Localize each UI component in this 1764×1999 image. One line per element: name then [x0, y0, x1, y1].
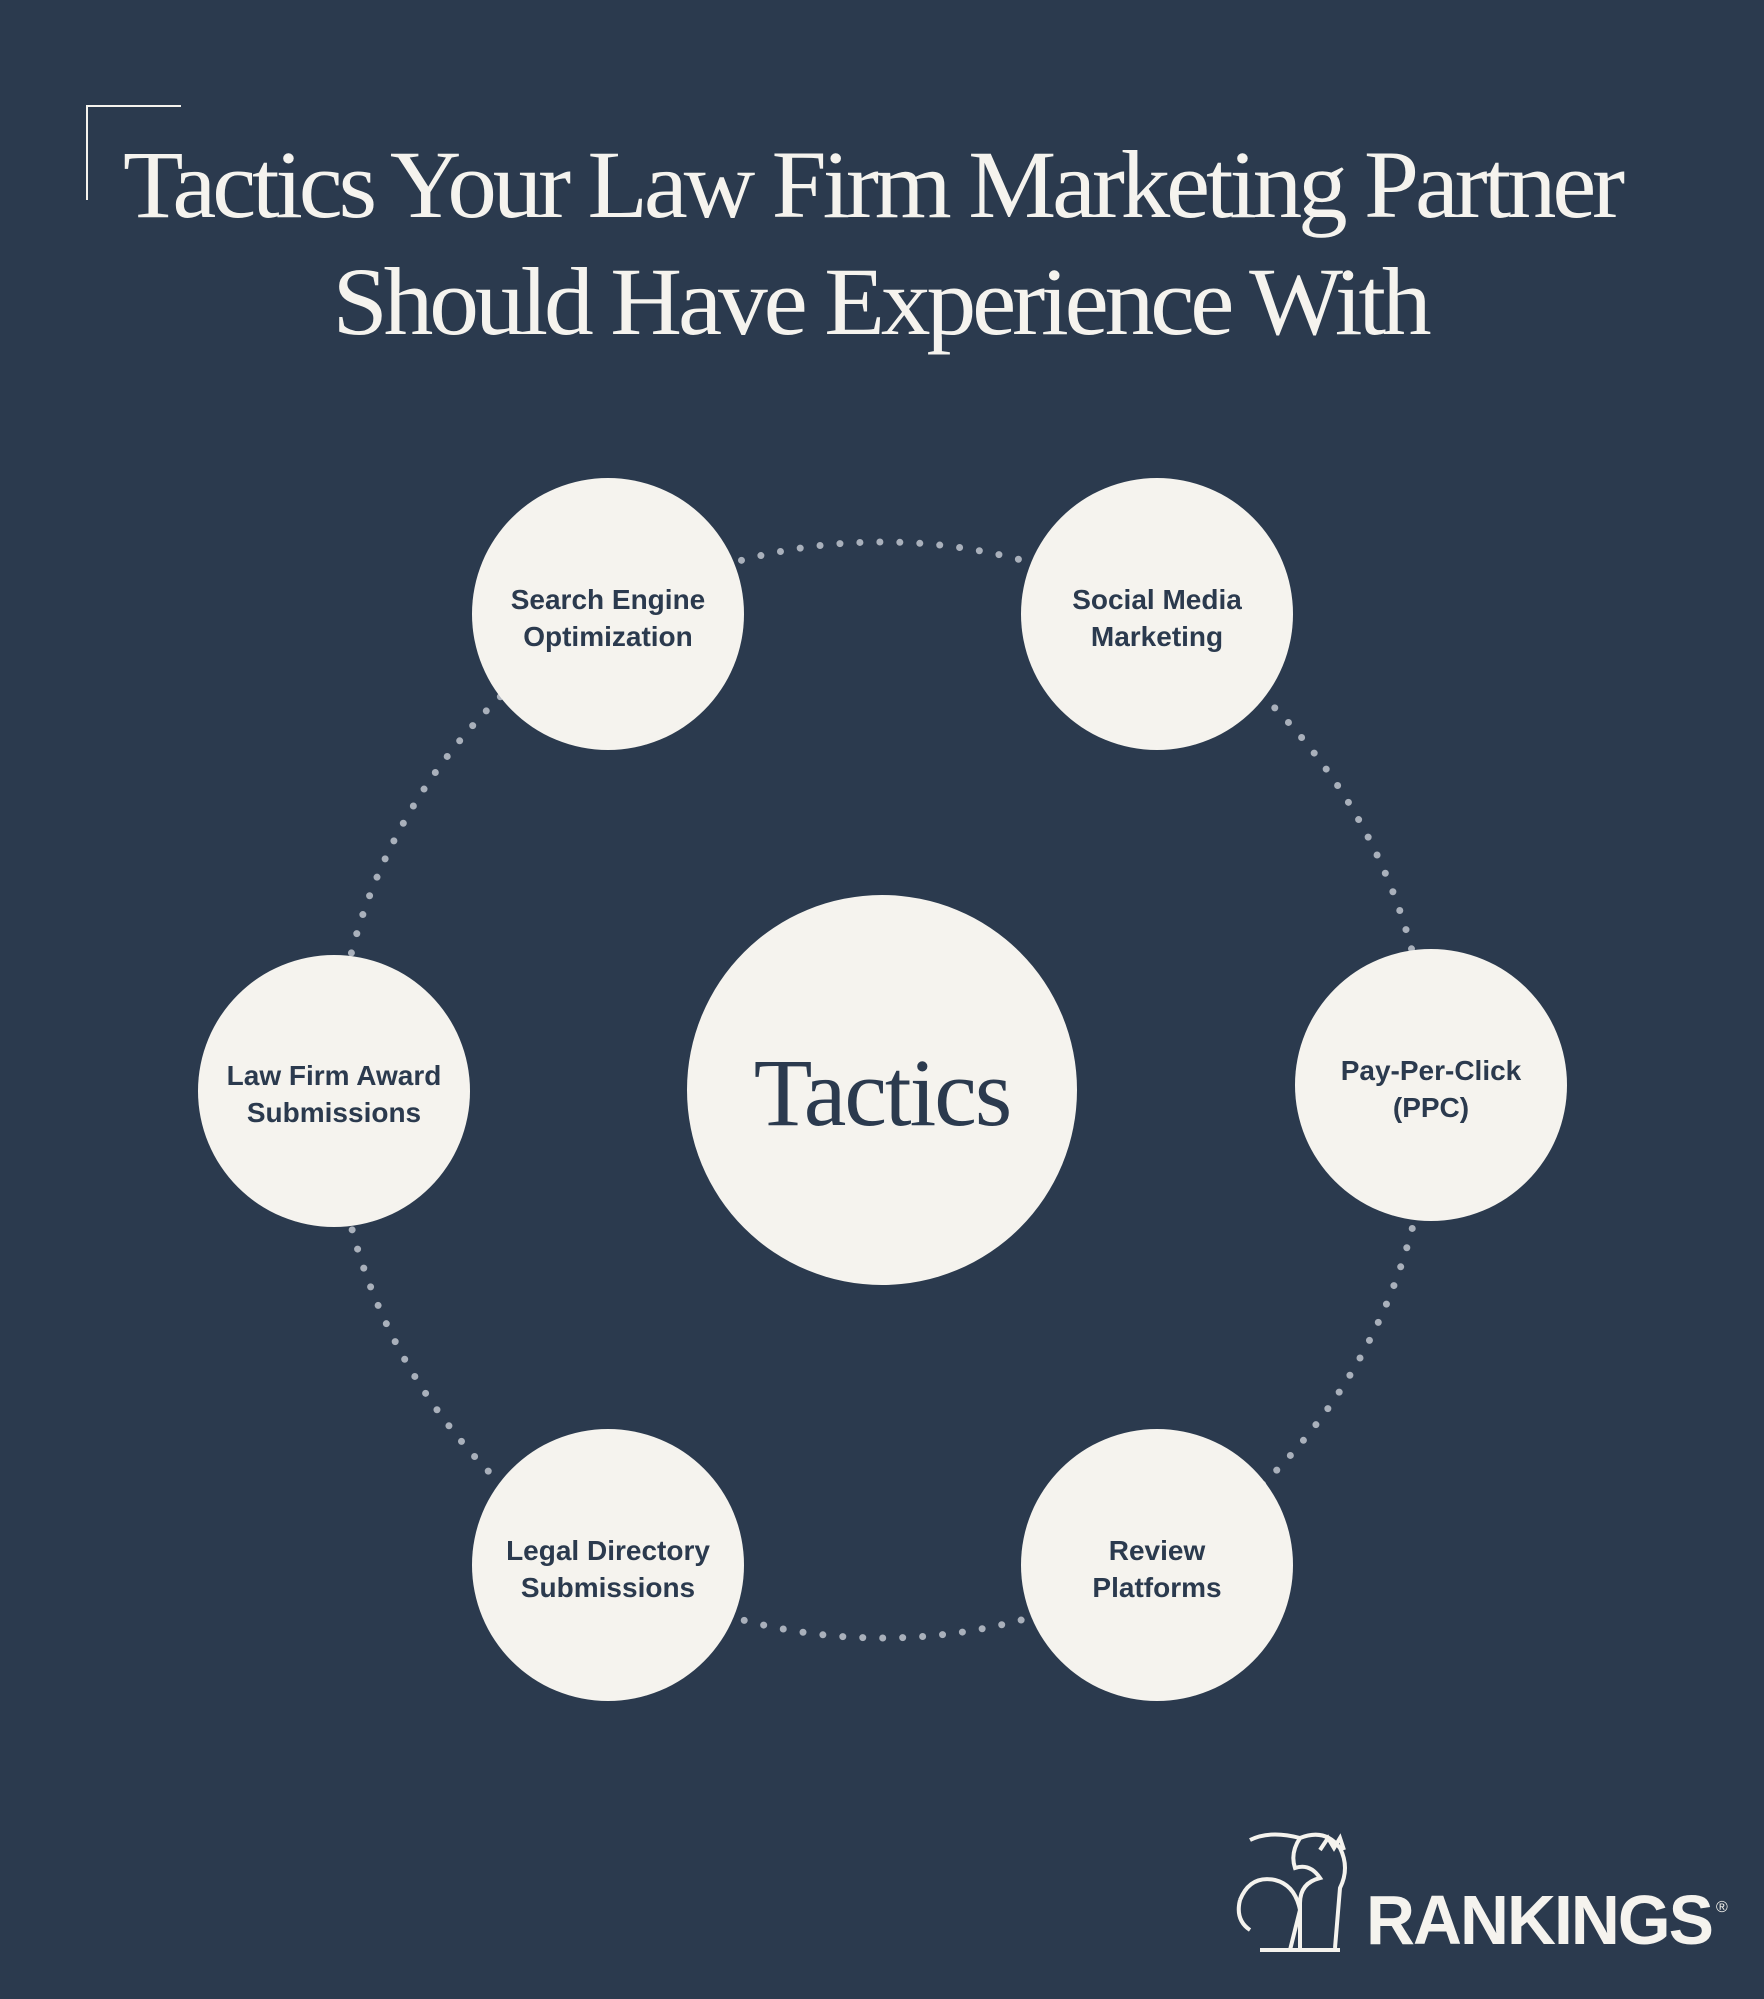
node: Review Platforms: Platforms [1092, 1572, 1222, 1603]
node: Review Platforms [1021, 1429, 1293, 1701]
node: PPC [1295, 949, 1567, 1221]
title: Should Have Experience With [332, 248, 1431, 355]
node: PPC: Pay-Per-Click [1341, 1055, 1522, 1086]
center circle: Tactics [687, 895, 1077, 1285]
icon: lion [1239, 1834, 1345, 1950]
node: Legal Directory: Submissions [521, 1572, 695, 1603]
node: Law Firm Award: Law Firm Award [227, 1060, 441, 1091]
title: Tactics Your Law Firm Marketing Partner [123, 131, 1625, 238]
node: Social Media: Social Media [1072, 584, 1242, 615]
node: Legal Directory: Legal Directory [506, 1535, 710, 1566]
center circle: Tactics: Tactics [754, 1039, 1010, 1146]
node: Review Platforms: Review [1109, 1535, 1205, 1566]
node: Social Media [1021, 478, 1293, 750]
node: SEO [472, 478, 744, 750]
node: SEO: Search Engine [511, 584, 705, 615]
node: PPC: (PPC) [1393, 1092, 1469, 1123]
title bracket [87, 106, 181, 200]
wordmark: RANKINGS [1366, 1881, 1712, 1959]
node: Law Firm Award [198, 955, 470, 1227]
node: Law Firm Award: Submissions [247, 1097, 421, 1128]
logo [1239, 1834, 1728, 1959]
logo: ® [1716, 1899, 1728, 1916]
title [123, 131, 1625, 355]
dotted ring [334, 542, 1430, 1638]
node: Legal Directory [472, 1429, 744, 1701]
node: Social Media: Marketing [1091, 621, 1223, 652]
node: SEO: Optimization [523, 621, 693, 652]
